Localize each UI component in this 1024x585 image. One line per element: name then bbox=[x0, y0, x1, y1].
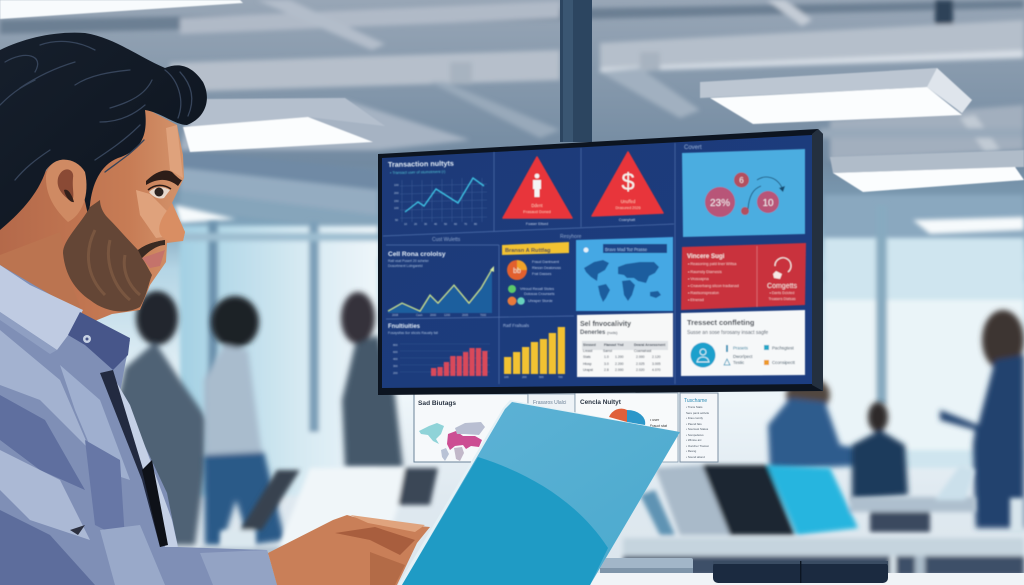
poster: bullet list: • Frau comtly bbox=[686, 416, 703, 420]
panel: transaction line chart: ▪ Transact user of stumotment (r) bbox=[390, 170, 446, 175]
panel: yellow bar chart: 100 bbox=[504, 375, 509, 379]
panel: red alerts list: • Dants Dcloted bbox=[770, 291, 794, 295]
panel: red alerts list: Vincere Sugi bbox=[687, 253, 725, 260]
panel: sell fraud table: 2.8 bbox=[604, 368, 609, 372]
panel: fraud bar chart: 600 bbox=[393, 350, 398, 354]
panel: sell fraud table: 1.0 bbox=[604, 355, 609, 359]
panel: transaction conflicting card: Susse an sose fsrosany insact sagfe bbox=[687, 330, 768, 336]
panel: sell fraud table: Hlosp bbox=[583, 362, 592, 366]
poster: bullet list: • Resng bbox=[686, 449, 697, 453]
beard bbox=[63, 200, 165, 311]
panel: risk bubble chart: 6 bbox=[739, 176, 744, 185]
panel: yellow status legend: Riessn Dealonoss bbox=[532, 266, 561, 270]
panel: sell fraud table: 2.200 bbox=[615, 362, 624, 366]
panel: transaction line chart: 50 bbox=[395, 218, 399, 222]
panel: red alerts list: • Vrosoapna bbox=[688, 277, 709, 281]
panel: sell fraud table: Urapst bbox=[583, 368, 593, 372]
warning triangle: person risk: Ddent bbox=[531, 203, 543, 208]
panel: cell area chart bbox=[388, 251, 494, 317]
man: foreground analyst bbox=[0, 33, 430, 585]
poster: side summary: Frasaros Ulalci bbox=[533, 400, 566, 406]
panel: red alerts list: • Reasoning pald liner Wiltsa bbox=[688, 262, 737, 266]
panel: sell fraud table: Sarrol bbox=[603, 349, 612, 353]
panel: transaction line chart: 80 bbox=[474, 222, 478, 226]
person: blurred colleague in dark jacket bbox=[341, 292, 403, 467]
poster: bullet list: • Paund fats bbox=[686, 422, 702, 426]
panel: sell fraud table bbox=[577, 313, 673, 377]
panel: yellow status legend: bb bbox=[513, 268, 521, 275]
poster: bullet list: Sere pamt activits bbox=[686, 411, 710, 415]
monitor bezel bbox=[378, 129, 823, 395]
panel: yellow bar chart bbox=[503, 323, 565, 379]
panel: red alerts list: Comgetts bbox=[767, 283, 797, 290]
hair strands bbox=[0, 41, 192, 180]
ear bbox=[46, 160, 86, 222]
panel: transaction line chart: 40 bbox=[434, 222, 438, 226]
warning triangle: dollar risk: Coanyhatt bbox=[619, 218, 635, 222]
panel: cell area chart: Cell Rona crololsy bbox=[388, 251, 446, 258]
warning triangle: dollar risk bbox=[592, 152, 663, 222]
shirt cuff bbox=[200, 550, 277, 585]
panel: world map bbox=[576, 237, 673, 311]
poster: bullet list: • Wintoe arc bbox=[686, 438, 702, 442]
panel: transaction line chart: 10 bbox=[404, 222, 408, 226]
panel: yellow status legend: Vrtroud Reoall Stotes bbox=[520, 287, 554, 291]
nose shadow bbox=[159, 203, 185, 241]
lips bbox=[142, 250, 165, 268]
panel: transaction conflicting card: Cconsipectt bbox=[772, 360, 796, 365]
section labels: Resyhore bbox=[560, 234, 582, 240]
warning triangle: person risk: Foaser Eitsed bbox=[526, 222, 548, 226]
panel: sell fraud table: 3.0 bbox=[604, 362, 609, 366]
panel: sell fraud table: Dearal Ansessment bbox=[634, 343, 666, 347]
poster: bullet list: • Trans Stats bbox=[686, 405, 703, 409]
warning triangle: dollar risk: $ bbox=[621, 169, 635, 196]
panel: red alerts list: • Rastsonsprealon bbox=[688, 291, 719, 295]
panel: transaction conflicting card: Testic bbox=[733, 360, 745, 365]
panel: cell area chart: Dosortment Lolngaretd bbox=[388, 264, 423, 268]
panel: transaction line chart: 70 bbox=[464, 222, 468, 226]
panel: red alerts list: • Raumsly Dlamesis bbox=[688, 270, 722, 274]
desk surface bbox=[585, 573, 1024, 585]
panel: transaction line chart bbox=[388, 159, 487, 226]
panel: yellow status legend: Uhraper Storde bbox=[528, 299, 553, 303]
panel: sell fraud table: 3.005 bbox=[652, 362, 661, 366]
face highlight bbox=[136, 125, 183, 238]
panel: cell area chart: Cash bbox=[416, 313, 423, 317]
panel: yellow bar chart: 200 bbox=[522, 375, 527, 379]
panel: transaction line chart: 30 bbox=[424, 222, 428, 226]
panel: yellow status legend: Fraud Dantnuent bbox=[532, 260, 559, 264]
panel: yellow bar chart: Ratf Fraltuals bbox=[503, 323, 530, 328]
panel: yellow status legend: Frat Dasses bbox=[532, 272, 552, 276]
panel: red alerts list: Troasers Dlatsas bbox=[768, 297, 796, 301]
person: blurred colleague in light sweater bbox=[204, 296, 285, 545]
right desk with laptops bbox=[623, 465, 1024, 576]
panel: transaction conflicting card: Dworlpect bbox=[733, 354, 753, 359]
ceiling column bbox=[560, 0, 592, 142]
warning triangle: dollar risk: Unuffed bbox=[621, 199, 636, 204]
hair bbox=[0, 33, 207, 230]
poster: regional map: Sad Biutags bbox=[418, 400, 456, 407]
section labels bbox=[432, 234, 582, 243]
panel: cell area chart: 1200 bbox=[444, 313, 451, 317]
panel: fraud bar chart: Fosaysifas 6or sticsts Raualiy fall bbox=[388, 331, 438, 335]
panel: sell fraud table: 2.000 bbox=[636, 355, 645, 359]
tablet on desk bbox=[600, 558, 693, 573]
panel: transaction line chart: 150 bbox=[394, 199, 399, 203]
panel: red alerts list: • Cnaverbang silcon tradlanad bbox=[688, 284, 739, 288]
panel: yellow status legend: Bransn A Ruttfag bbox=[505, 248, 551, 254]
panel: cell area chart: 2008 bbox=[392, 313, 399, 317]
panel: sell fraud table: 2.020 bbox=[636, 368, 645, 372]
left desk with laptops and cup bbox=[200, 468, 438, 555]
windows bbox=[180, 205, 1024, 496]
person: blurred man in navy leaning in bbox=[768, 377, 868, 470]
ceiling lights bbox=[0, 0, 1024, 192]
panel: red alerts list bbox=[681, 243, 806, 310]
neck and face bbox=[0, 108, 185, 325]
panel: transaction line chart: 50 bbox=[444, 222, 448, 226]
panel: yellow bar chart: 700 bbox=[558, 375, 563, 379]
poster: bullet list: • Sompelscus bbox=[686, 433, 704, 437]
shirt collar bbox=[0, 265, 130, 370]
panel: transaction conflicting card: Pachsgtest bbox=[772, 346, 795, 350]
poster: bullet list bbox=[680, 393, 718, 462]
poster: regional map bbox=[414, 394, 528, 462]
panel dividers bbox=[383, 143, 675, 384]
panel: transaction line chart: 100 bbox=[394, 206, 399, 210]
panel: sell fraud table: Coamahast bbox=[634, 349, 651, 353]
screen bbox=[382, 135, 812, 388]
panel: world map: Brave Mad Toz Prasse bbox=[605, 247, 648, 252]
panel: fraud bar chart bbox=[388, 324, 490, 376]
panel: yellow bar chart: 500 bbox=[539, 375, 544, 379]
poster: bullet list: • Sound aliond bbox=[686, 455, 705, 459]
poster: side summary bbox=[528, 394, 575, 424]
person: blurred presenter in navy bbox=[940, 310, 1024, 528]
panel: transaction conflicting card: Prasets bbox=[733, 346, 749, 350]
panel: cell area chart: 2000 bbox=[430, 313, 437, 317]
panel: fraud bar chart: 400 bbox=[393, 357, 398, 361]
panel: fraud bar chart: 800 bbox=[393, 343, 398, 347]
panel: yellow status legend: Dolosoa Crounsets bbox=[524, 292, 555, 296]
panel: transaction line chart: Transaction nultyts bbox=[388, 159, 454, 169]
shirt body bbox=[0, 265, 277, 585]
warning triangle: person risk: Frasaud Doned bbox=[523, 209, 551, 214]
panel: sell fraud table: Denerles (ruds) bbox=[580, 330, 618, 336]
monitor: dashboard display bbox=[378, 129, 823, 395]
poster: pie chart summary bbox=[575, 393, 678, 462]
poster: bullet list: • Sourcest Status bbox=[686, 427, 709, 431]
warning triangle: person risk bbox=[503, 157, 572, 226]
panel: transaction line chart: 60 bbox=[454, 222, 458, 226]
warning triangle: dollar risk: Drasured 2026 bbox=[615, 206, 641, 210]
panel: sell fraud table: 4.070 bbox=[652, 368, 661, 372]
panel: sell fraud table: Sel fnvocalivity bbox=[580, 321, 631, 328]
panel: sell fraud table: Stats bbox=[583, 355, 591, 359]
ceiling beams and fixtures bbox=[0, 0, 1024, 282]
panel: sell fraud table: 2.000 bbox=[615, 368, 624, 372]
neck shadow bbox=[0, 232, 85, 326]
panel: fraud bar chart: Fnultiuities bbox=[388, 324, 421, 330]
shirt folds bbox=[0, 330, 165, 585]
panel: cell area chart: 2005 bbox=[462, 313, 469, 317]
panel: fraud bar chart: 300 bbox=[393, 364, 398, 368]
poster: pie chart summary: • user bbox=[650, 418, 660, 422]
panel: sell fraud table: 1.200 bbox=[615, 355, 624, 359]
panel: red alerts list: • Etnerad bbox=[688, 298, 704, 302]
panel: fraud bar chart: 200 bbox=[393, 371, 398, 375]
panel: risk bubble chart: 10 bbox=[762, 198, 774, 209]
panel: transaction line chart: 20 bbox=[414, 222, 418, 226]
panel: risk bubble chart: Covert bbox=[684, 145, 702, 151]
panel: transaction conflicting card bbox=[681, 310, 805, 376]
section labels: Cust Wuletts bbox=[432, 237, 461, 243]
poster: pie chart summary: Cencla Nultyt bbox=[580, 399, 622, 406]
panel: transaction line chart: 200 bbox=[394, 191, 399, 195]
device on desk bbox=[713, 561, 888, 583]
panel: cell area chart: Ratl vsat Posert 20 scheter bbox=[388, 259, 430, 263]
person: blurred man in dark suit bbox=[852, 402, 908, 500]
panel: risk bubble chart bbox=[682, 145, 805, 237]
panel: transaction line chart: 100 bbox=[394, 183, 399, 187]
panel: risk bubble chart: 23% bbox=[710, 198, 730, 209]
panel: sell fraud table: 2.025 bbox=[636, 362, 645, 366]
panel: cell area chart: 7000 bbox=[480, 313, 487, 317]
poster: pie chart summary: Frauct stat bbox=[650, 424, 667, 428]
panel: sell fraud table: Slessed bbox=[583, 343, 596, 347]
person: blurred colleague in grey suit bbox=[118, 291, 208, 545]
panel: sell fraud table: 2.120 bbox=[652, 355, 661, 359]
eye and brow bbox=[146, 170, 182, 199]
panel: yellow status legend bbox=[502, 242, 569, 306]
hand on laptop bbox=[268, 515, 430, 585]
laptop lid bbox=[398, 400, 680, 585]
shirt placket and tie bbox=[100, 370, 178, 547]
panel: sell fraud table: Flanout Ynd bbox=[604, 343, 624, 347]
wall posters under the monitor bbox=[414, 393, 718, 462]
panel: transaction conflicting card: Tressect confleting bbox=[687, 318, 755, 327]
poster: bullet list: • Ouccher Tramat bbox=[686, 444, 709, 448]
poster: bullet list: Tuschame bbox=[684, 398, 707, 404]
panel: sell fraud table: Lreast bbox=[583, 349, 592, 353]
